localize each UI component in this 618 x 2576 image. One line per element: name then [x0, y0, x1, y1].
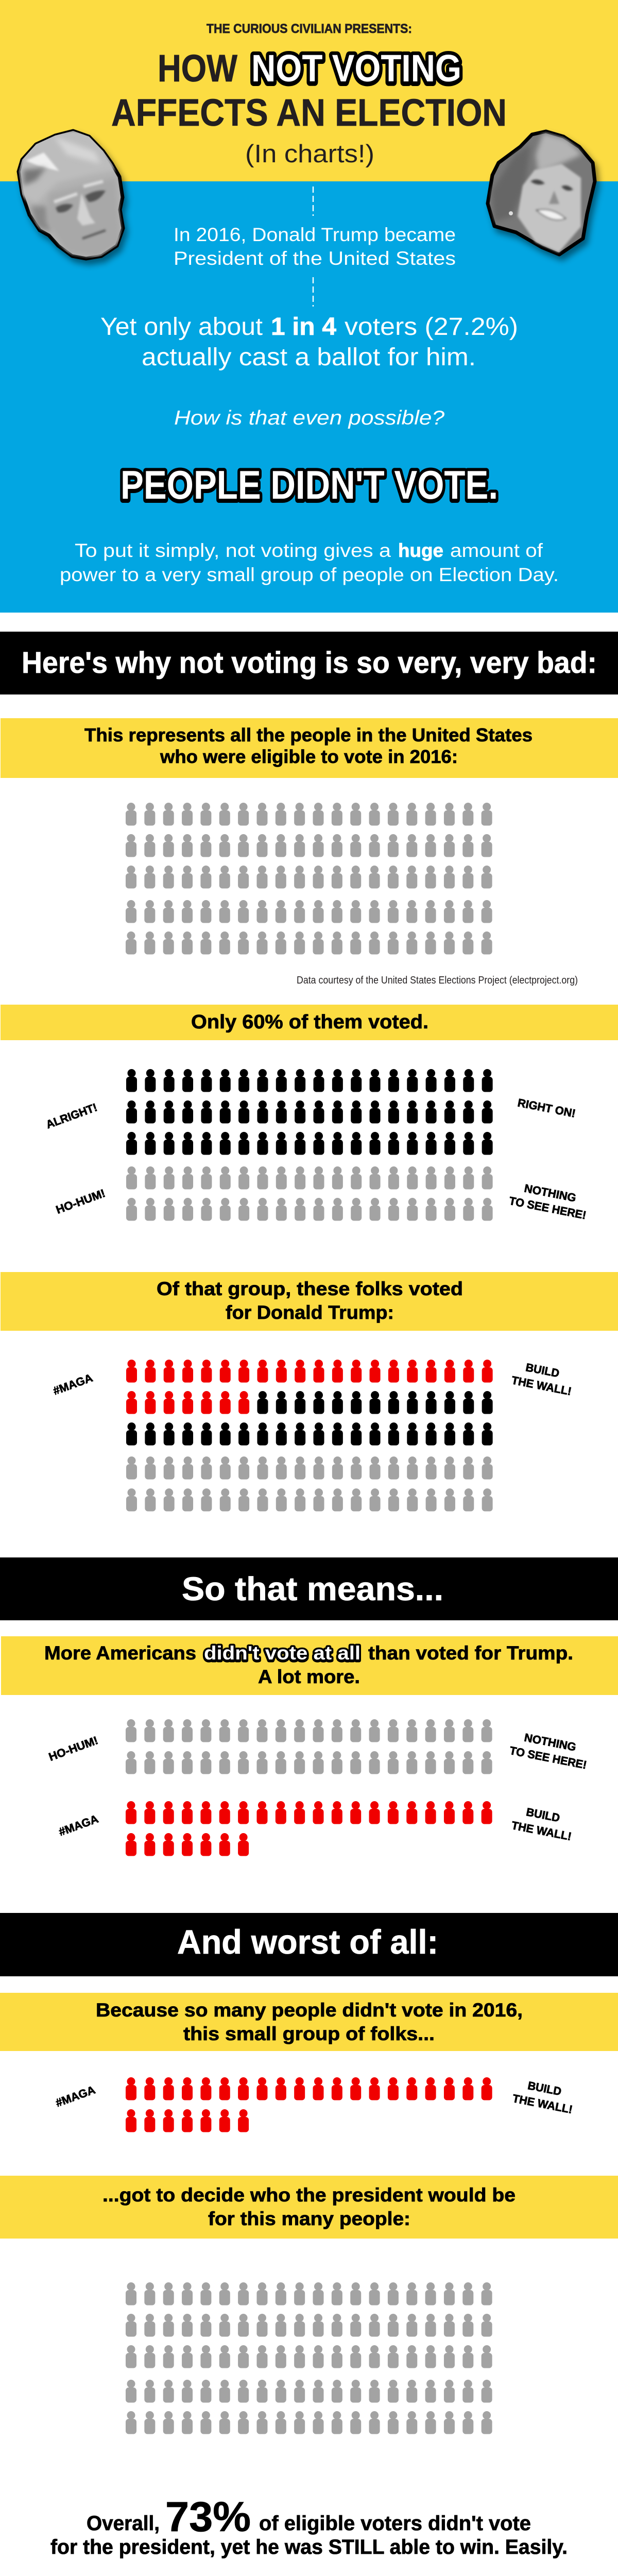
label: nothing to see here: NOTHING — [523, 1182, 577, 1205]
heading bar: because so many people didn't vote — [0, 1993, 618, 2051]
heading bar: more americans didn't vote: More Americans — [44, 1642, 196, 1664]
hero panel: yellow header — [0, 0, 618, 181]
label: build the wall — [510, 1805, 573, 1843]
heading bar: all eligible people: who were eligible to vote in 2016: — [160, 746, 458, 767]
heading bar: got to decide: ...got to decide who the president would be — [102, 2184, 516, 2206]
text: 73 percent conclusion — [50, 2494, 568, 2558]
label: build the wall — [511, 2079, 574, 2116]
heading bar: got to decide — [0, 2176, 618, 2239]
label: build the wall: THE WALL! — [511, 2092, 574, 2116]
text: to put it simply: amount of — [450, 540, 543, 561]
banner: here's why not voting is so very very bad — [0, 632, 618, 694]
banner: and worst of all: And worst of all: — [177, 1923, 438, 1961]
text: 1 in 4 voters: Yet only about — [100, 313, 263, 341]
chart: non-voters vs trump voters pictogram — [126, 1719, 492, 1856]
title: HOW — [158, 47, 237, 90]
heading bar: more americans didn't vote: than voted for Trump. — [368, 1642, 573, 1664]
hero panel: blue intro — [0, 181, 618, 613]
heading bar: all eligible people — [1, 718, 618, 778]
divider: dashed line top — [313, 187, 314, 216]
heading bar: because so many people didn't vote: Because so many people didn't vote in 2016, — [96, 1999, 523, 2021]
label: nothing to see here — [508, 1182, 587, 1222]
label: ho-hum: HO-HUM! — [54, 1187, 107, 1216]
heading bar: only 60 percent voted: Only 60% of them voted. — [191, 1011, 428, 1033]
label: maga: #MAGA — [54, 2083, 97, 2109]
label: build the wall — [510, 1361, 573, 1398]
text: 1 in 4 voters — [100, 313, 518, 371]
label: maga: #MAGA — [52, 1371, 94, 1397]
label: right on: RIGHT ON! — [517, 1096, 577, 1120]
label: build the wall: BUILD — [525, 1805, 561, 1824]
label: nothing to see here: NOTHING — [523, 1731, 577, 1754]
text: to put it simply — [60, 540, 559, 585]
label: build the wall: THE WALL! — [510, 1819, 573, 1843]
subtitle: in charts: (In charts!) — [245, 140, 374, 168]
banner: so that means — [0, 1557, 618, 1620]
heading bar: voted for trump — [1, 1272, 618, 1331]
text: 73 percent conclusion: Overall, — [87, 2512, 160, 2535]
callout: people didn't vote: PEOPLE DIDN'T VOTE. — [121, 462, 498, 507]
label: nothing to see here: TO SEE HERE! — [508, 1194, 587, 1222]
heading bar: voted for trump: Of that group, these folks voted — [157, 1278, 463, 1299]
banner: so that means: So that means... — [182, 1570, 443, 1607]
heading bar: more americans didn't vote: didn't vote at all — [204, 1642, 360, 1664]
text: to put it simply: To put it simply, not voting gives a — [75, 540, 391, 561]
label: ho-hum: HO-HUM! — [47, 1734, 100, 1764]
heading bar: all eligible people: This represents all the people in the United States — [84, 724, 533, 745]
kicker: the curious civilian presents: THE CURIOUS CIVILIAN PRESENTS: — [207, 22, 412, 36]
title: NOT VOTING — [251, 47, 461, 90]
chart: everyone else pictogram — [126, 2282, 492, 2434]
icon: trump head — [19, 129, 123, 259]
text: 73 percent conclusion: for the president, yet he was STILL able to win. Easily. — [50, 2536, 568, 2558]
chart: trump voters pictogram — [126, 1360, 493, 1512]
title — [111, 47, 507, 134]
heading bar: voted for trump: for Donald Trump: — [226, 1302, 394, 1323]
heading bar: more americans didn't vote — [1, 1636, 618, 1695]
chart: voters vs non-voters pictogram — [126, 1069, 493, 1221]
label: maga: #MAGA — [57, 1812, 100, 1838]
heading bar: only 60 percent voted — [1, 1005, 618, 1040]
banner: and worst of all — [0, 1913, 618, 1976]
heading bar: because so many people didn't vote: this small group of folks... — [183, 2023, 435, 2044]
label: build the wall: THE WALL! — [510, 1374, 573, 1398]
label: nothing to see here: TO SEE HERE! — [508, 1744, 588, 1771]
text: 1 in 4 voters: 1 in 4 — [271, 313, 336, 341]
label: build the wall: BUILD — [527, 2079, 562, 2098]
text: 1 in 4 voters: voters (27.2%) — [345, 313, 518, 341]
banner: here's why not voting is so very very bad: Here's why not voting is so very, very bad: — [22, 646, 597, 680]
text: in 2016 donald trump became president: President of the United States — [174, 248, 456, 269]
text: in 2016 donald trump became president: In 2016, Donald Trump became — [174, 224, 456, 245]
text: 73 percent conclusion: 73% — [165, 2494, 251, 2540]
title: AFFECTS AN ELECTION — [111, 91, 507, 134]
text: to put it simply: power to a very small group of people on Election Day. — [60, 564, 559, 585]
label: build the wall: BUILD — [525, 1361, 560, 1380]
source note: Data courtesy of the United States Elections Project (electproject.org) — [297, 975, 578, 986]
text: 1 in 4 voters: actually cast a ballot for him. — [142, 344, 476, 371]
text: how is that even possible: How is that even possible? — [174, 407, 444, 429]
icon: clinton head — [488, 131, 595, 255]
divider: dashed line bottom — [313, 277, 314, 307]
text: to put it simply: huge — [398, 540, 443, 561]
text: in 2016 donald trump became president — [174, 224, 456, 269]
heading bar: got to decide: for this many people: — [208, 2208, 410, 2229]
text: 73 percent conclusion: of eligible voters didn't vote — [259, 2512, 531, 2535]
label: nothing to see here — [508, 1731, 588, 1771]
chart: all eligible voters pictogram — [126, 803, 492, 954]
chart: small group pictogram — [126, 2077, 492, 2132]
heading bar: more americans didn't vote: A lot more. — [258, 1666, 360, 1687]
label: alright: ALRIGHT! — [44, 1100, 99, 1131]
